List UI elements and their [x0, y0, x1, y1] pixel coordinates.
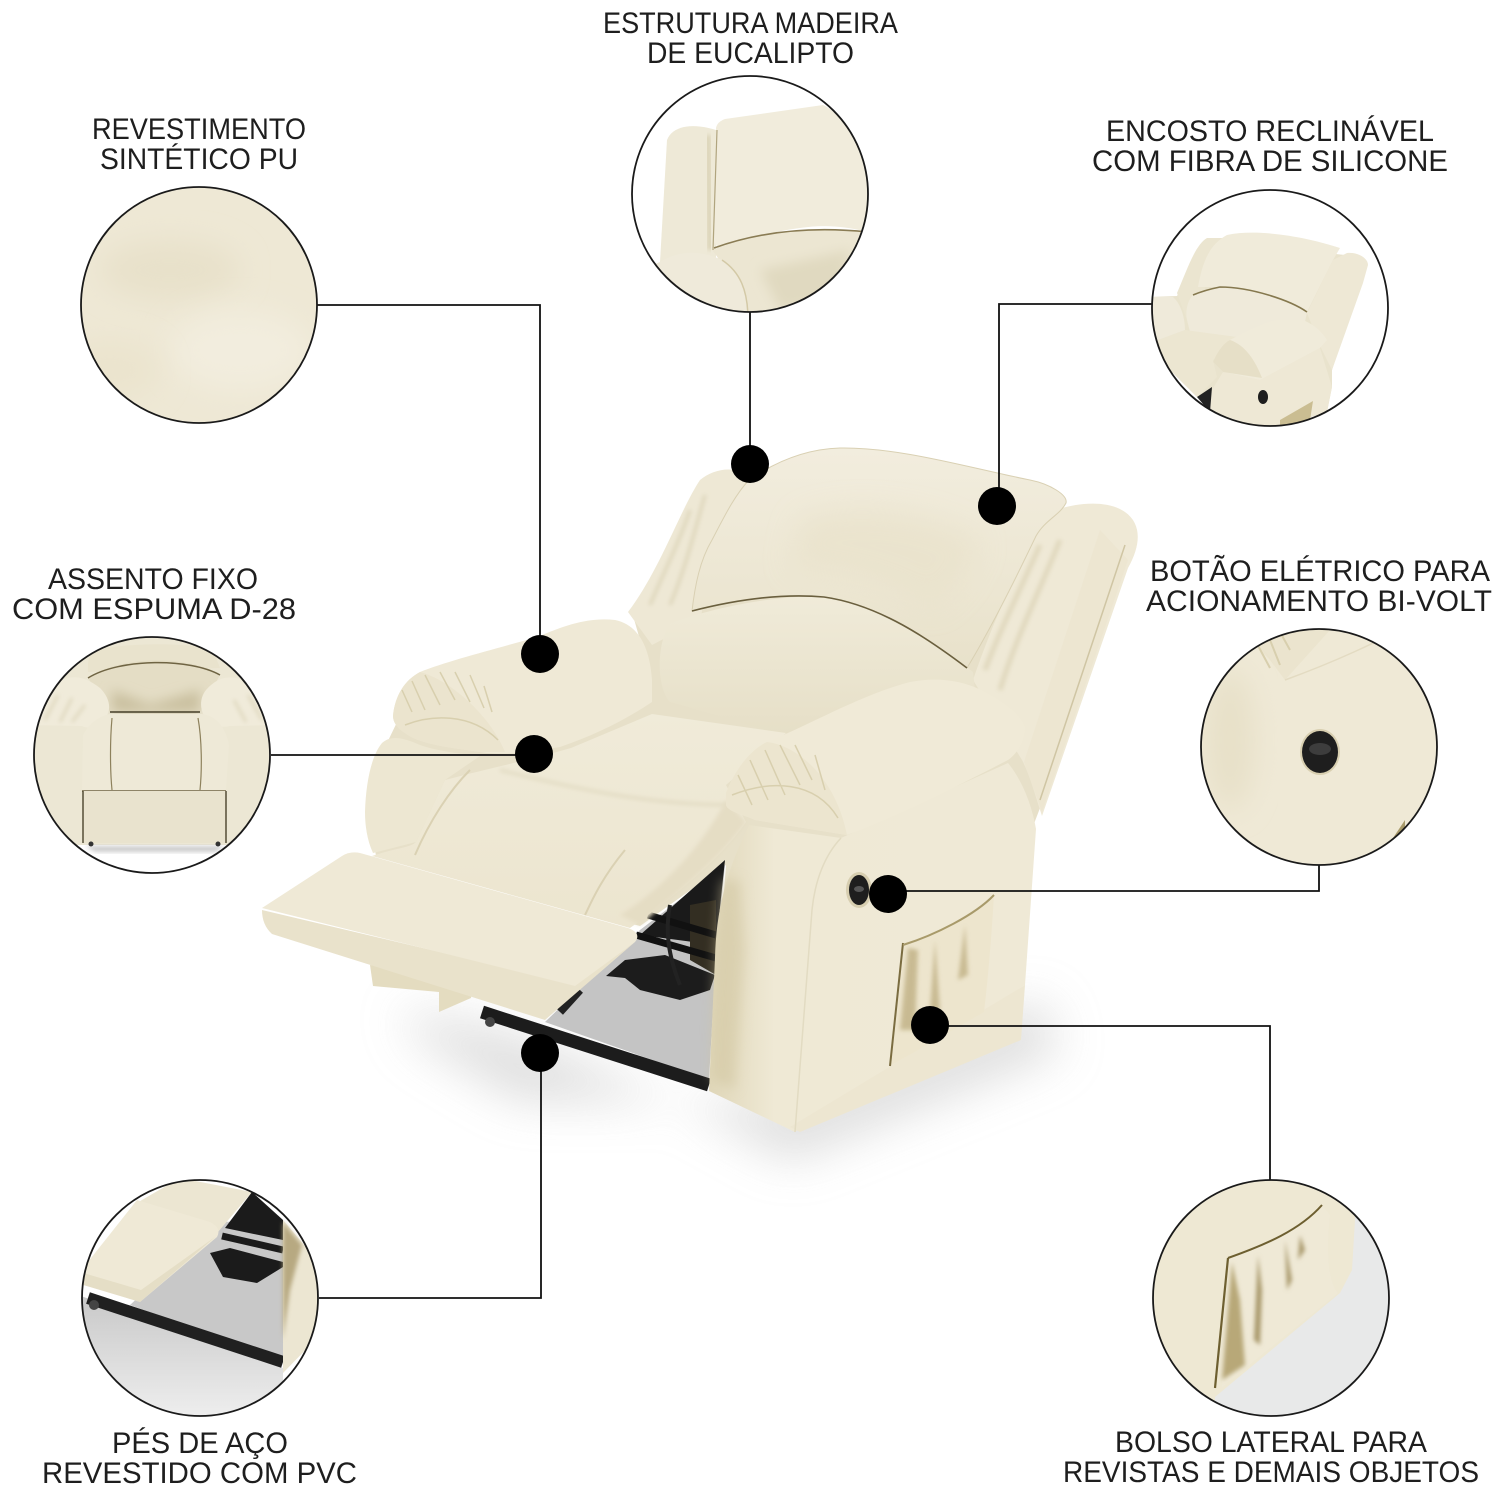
left armrest: [393, 619, 652, 754]
connector line: botão: [900, 865, 1319, 891]
heading: encosto reclinável: COM FIBRA DE SILICONE: [1092, 145, 1448, 178]
connector line: estrutura: [749, 312, 751, 450]
marker dots: [515, 445, 1016, 1072]
detail circle: side pocket: [1152, 1179, 1390, 1417]
detail circle: bivolt electric button: [1195, 625, 1445, 875]
heading: revestimento sintético PU: [92, 113, 306, 176]
floor shadow: [400, 1000, 1060, 1160]
main product: recliner armchair: [262, 448, 1138, 1160]
heading: pés de aço: PÉS DE AÇO: [112, 1427, 288, 1460]
left base side: [365, 738, 480, 853]
connector line: pés: [319, 1065, 541, 1298]
heading: estrutura madeira de eucalipto: ESTRUTURA MADEIRA: [603, 7, 898, 40]
right side panel: [709, 763, 1036, 1132]
headrest cushion: [692, 448, 1066, 668]
heading: botão elétrico: ACIONAMENTO BI-VOLT: [1146, 585, 1492, 618]
heading: assento fixo: COM ESPUMA D-28: [12, 593, 296, 626]
detail circle: fixed seat with D-28 foam: [30, 630, 278, 875]
heading: assento fixo: ASSENTO FIXO: [48, 563, 258, 596]
electric button: [846, 872, 872, 908]
heading: bolso lateral: REVISTAS E DEMAIS OBJETOS: [1063, 1456, 1479, 1489]
footrest: [262, 852, 637, 1020]
mechanism under the seat: [482, 860, 725, 1085]
detail circle: reclining back with silicone fibre: [1148, 190, 1388, 432]
heading: pés de aço: REVESTIDO COM PVC: [42, 1457, 357, 1490]
heading: botão elétrico: [1146, 554, 1492, 618]
heading: revestimento sintético PU: SINTÉTICO PU: [100, 143, 298, 176]
connector line: revestimento: [317, 305, 540, 640]
heading: encosto reclinável: ENCOSTO RECLINÁVEL: [1106, 115, 1434, 148]
connector line: assento: [271, 754, 520, 756]
heading: estrutura madeira de eucalipto: [603, 7, 898, 70]
chair silhouette backing: [369, 452, 1128, 1128]
lumbar cushion: [660, 596, 975, 735]
seat cushion: [372, 714, 786, 928]
right side wing of backrest: [973, 504, 1138, 816]
detail circle: eucalyptus wood frame: [631, 75, 869, 313]
detail circle: synthetic PU upholstery: [80, 186, 318, 424]
right armrest: [726, 680, 1025, 835]
detail circle: steel feet coated with PVC: [78, 1178, 325, 1420]
heading: revestimento sintético PU: REVESTIMENTO: [92, 113, 306, 146]
connector line: bolso: [940, 1026, 1270, 1180]
heading: bolso lateral: BOLSO LATERAL PARA: [1115, 1426, 1427, 1459]
heading: pés de aço: [42, 1427, 357, 1490]
heading: assento fixo: [12, 563, 296, 626]
connector line: encosto: [999, 304, 1152, 495]
heading: encosto reclinável: [1092, 115, 1448, 178]
heading: estrutura madeira de eucalipto: DE EUCALIPTO: [647, 37, 854, 70]
left side wing of backrest: [628, 470, 755, 645]
side pocket: [890, 894, 994, 1066]
heading: bolso lateral: [1063, 1426, 1479, 1489]
heading: botão elétrico: BOTÃO ELÉTRICO PARA: [1150, 554, 1490, 588]
